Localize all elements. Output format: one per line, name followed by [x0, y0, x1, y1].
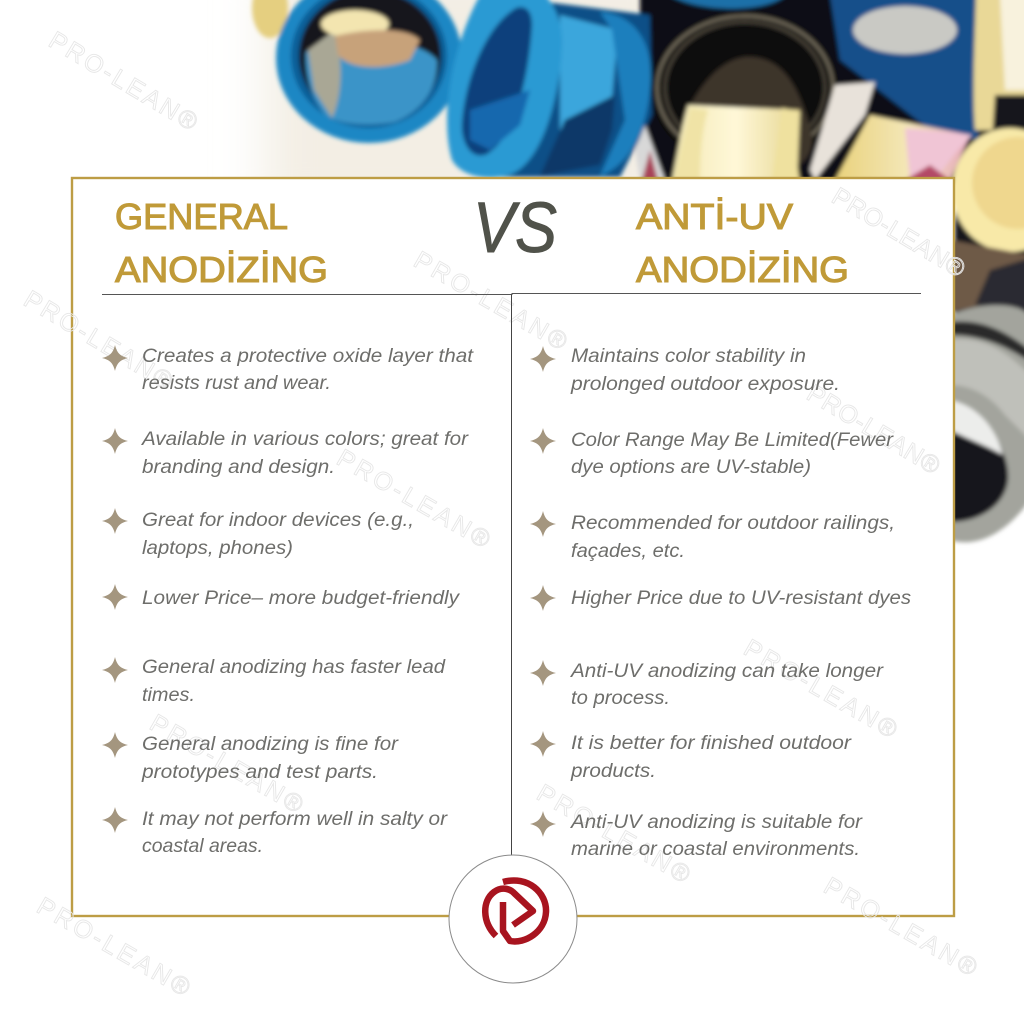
point: process time: Anti-UV anodizing can take longer — [570, 661, 884, 682]
watermarks: PRO-LEAN® — [44, 26, 203, 137]
point: process time: to process. — [571, 688, 670, 709]
column: anti-UV anodizing points — [530, 346, 912, 860]
point: lead times: General anodizing has faster lead — [142, 657, 447, 678]
gold ring fragment, top left — [252, 0, 288, 38]
watermarks: PRO-LEAN® — [32, 892, 195, 1002]
watermarks: PRO-LEAN® — [332, 444, 495, 554]
grey ring, right edge — [950, 305, 1024, 542]
point: outdoor railings: façades, etc. — [571, 541, 685, 562]
icon: red play logo — [485, 880, 546, 941]
watermarks: PRO-LEAN® — [19, 285, 178, 396]
point: lead times — [102, 657, 447, 706]
point: color range: Color Range May Be Limited(Fewer — [571, 430, 894, 451]
watermarks: PRO-LEAN® — [819, 872, 982, 982]
watermarks: PRO-LEAN® — [739, 634, 902, 744]
brown reflective piece, right edge — [950, 240, 1024, 312]
point: color stability — [530, 346, 840, 395]
heading: anti-UV anodizing: ANODİZİNG — [636, 249, 849, 290]
flared blue sleeve, centre — [447, 0, 652, 178]
watermarks: PRO-LEAN® — [827, 182, 970, 284]
point: finished products — [530, 731, 852, 782]
dark ring, centre right — [651, 12, 839, 172]
point: price — [530, 585, 912, 611]
point: colors: branding and design. — [142, 457, 335, 478]
point: outdoor railings — [530, 511, 895, 562]
heading: anti-UV anodizing: ANTİ-UV — [636, 196, 793, 237]
point: finished products: products. — [570, 761, 656, 782]
point: finished products: It is better for finished outdoor — [571, 733, 852, 754]
point: prototypes — [102, 732, 399, 783]
point: lead times: times. — [142, 685, 195, 706]
point: price: Lower Price– more budget-friendly — [142, 588, 461, 609]
point: protective oxide layer: Creates a protective oxide layer that — [142, 346, 474, 367]
heading: general anodizing: ANODİZİNG — [115, 249, 328, 290]
blue ring, left — [276, 0, 462, 143]
pale gold ring, right edge — [952, 128, 1024, 252]
point: protective oxide layer — [102, 345, 474, 394]
heading: VS: VS — [473, 189, 557, 268]
point: color stability: Maintains color stability in — [571, 346, 806, 367]
point: prototypes: General anodizing is fine for — [142, 734, 399, 755]
point: coastal — [102, 807, 448, 857]
logo badge — [449, 855, 577, 983]
photo: anodized metal parts — [252, 0, 1024, 542]
point: protective oxide layer: resists rust and wear. — [142, 373, 331, 394]
blue sleeve, top right — [670, 0, 980, 140]
point: colors: Available in various colors; great for — [141, 429, 469, 450]
point: color range — [530, 428, 894, 478]
point: marine: Anti-UV anodizing is suitable for — [570, 812, 863, 833]
point: outdoor railings: Recommended for outdoor railings, — [571, 513, 895, 534]
watermarks: PRO-LEAN® — [802, 379, 945, 481]
heading: general anodizing: GENERAL — [115, 196, 288, 237]
heading: general anodizing — [115, 196, 328, 290]
heading: anti-UV anodizing — [636, 196, 849, 290]
point: process time — [530, 660, 884, 709]
point: colors — [102, 428, 469, 478]
point: price — [102, 584, 461, 610]
point: indoor devices: Great for indoor devices (e.g., — [142, 510, 414, 531]
chrome gold sleeve, right — [810, 0, 1024, 180]
point: price: Higher Price due to UV-resistant dyes — [571, 588, 912, 609]
watermarks: PRO-LEAN® — [409, 246, 572, 356]
watermarks: PRO-LEAN® — [532, 779, 695, 889]
point: indoor devices — [102, 508, 414, 559]
point: coastal: It may not perform well in salty or — [142, 809, 448, 830]
point: prototypes: prototypes and test parts. — [141, 762, 378, 783]
point: coastal: coastal areas. — [142, 836, 263, 857]
point: color stability: prolonged outdoor exposure. — [570, 374, 840, 395]
point: marine: marine or coastal environments. — [571, 839, 860, 860]
point: indoor devices: laptops, phones) — [142, 538, 293, 559]
column: general anodizing points — [102, 345, 474, 857]
point: color range: dye options are UV-stable) — [571, 457, 811, 478]
point: marine — [530, 811, 863, 860]
gold sleeve, bottom centre — [635, 105, 800, 180]
watermarks: PRO-LEAN® — [145, 709, 308, 819]
